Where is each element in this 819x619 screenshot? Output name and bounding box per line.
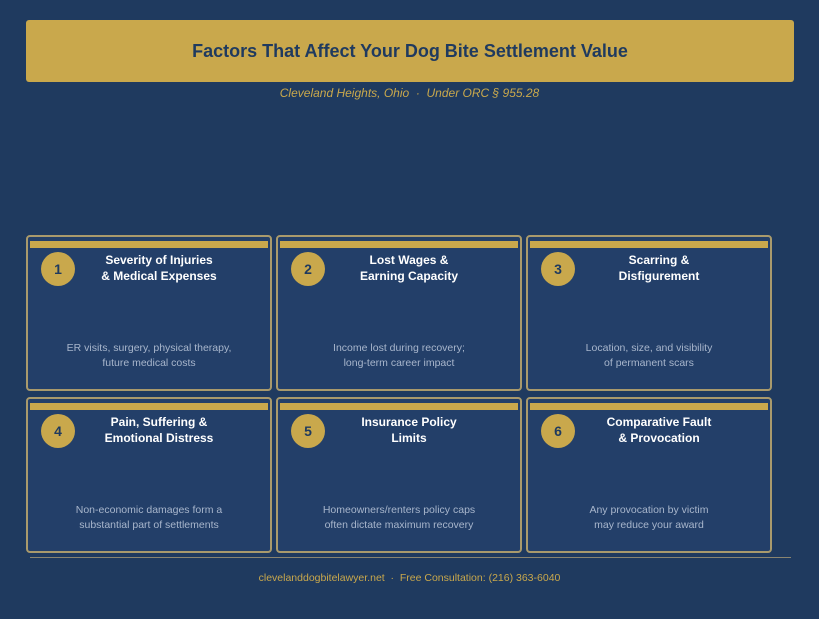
card 3: of permanent scars — [604, 357, 694, 369]
card 4: Pain, Suffering & — [111, 415, 207, 429]
card 3: Location, size, and visibility — [586, 342, 712, 354]
card 1: & Medical Expenses — [101, 269, 217, 283]
card 1: 1 — [54, 261, 62, 277]
card 5: often dictate maximum recovery — [325, 519, 473, 531]
card 5: Insurance Policy — [361, 415, 457, 429]
card 3: Disfigurement — [619, 269, 699, 283]
card 2: 2 — [304, 261, 312, 277]
card 2 — [276, 235, 522, 391]
card 5 — [276, 397, 522, 553]
card 6: Any provocation by victim — [589, 504, 709, 516]
card 1: ER visits, surgery, physical therapy, — [67, 342, 231, 354]
card 6: Comparative Fault — [607, 415, 711, 429]
card 2: Earning Capacity — [360, 269, 458, 283]
card 1 — [26, 235, 272, 391]
card 6: may reduce your award — [594, 519, 704, 531]
card 1: Severity of Injuries — [105, 253, 213, 267]
card 3: Scarring & — [629, 253, 689, 267]
card 5: Limits — [391, 431, 427, 445]
card 3: 3 — [554, 261, 562, 277]
card 6: & Provocation — [618, 431, 700, 445]
card 1: future medical costs — [102, 357, 196, 369]
title: Factors That Affect Your Dog Bite Settlement Value — [192, 41, 628, 61]
card 3 — [526, 235, 772, 391]
card 4: substantial part of settlements — [79, 519, 219, 531]
card 2: long-term career impact — [344, 357, 454, 369]
card 4: 4 — [54, 423, 62, 439]
title — [26, 20, 794, 82]
card 2: Lost Wages & — [370, 253, 448, 267]
footer: clevelanddogbitelawyer.net · Free Consultation: (216) 363-6040 — [259, 572, 560, 584]
card 6 — [526, 397, 772, 553]
card 5: 5 — [304, 423, 312, 439]
card 5: Homeowners/renters policy caps — [323, 504, 475, 516]
card 2: Income lost during recovery; — [333, 342, 465, 354]
subtitle: Cleveland Heights, Ohio · Under ORC § 955.28 — [280, 86, 539, 100]
card 4: Emotional Distress — [105, 431, 213, 445]
card 6: 6 — [554, 423, 562, 439]
card 4: Non-economic damages form a — [76, 504, 222, 516]
card 4 — [26, 397, 272, 553]
